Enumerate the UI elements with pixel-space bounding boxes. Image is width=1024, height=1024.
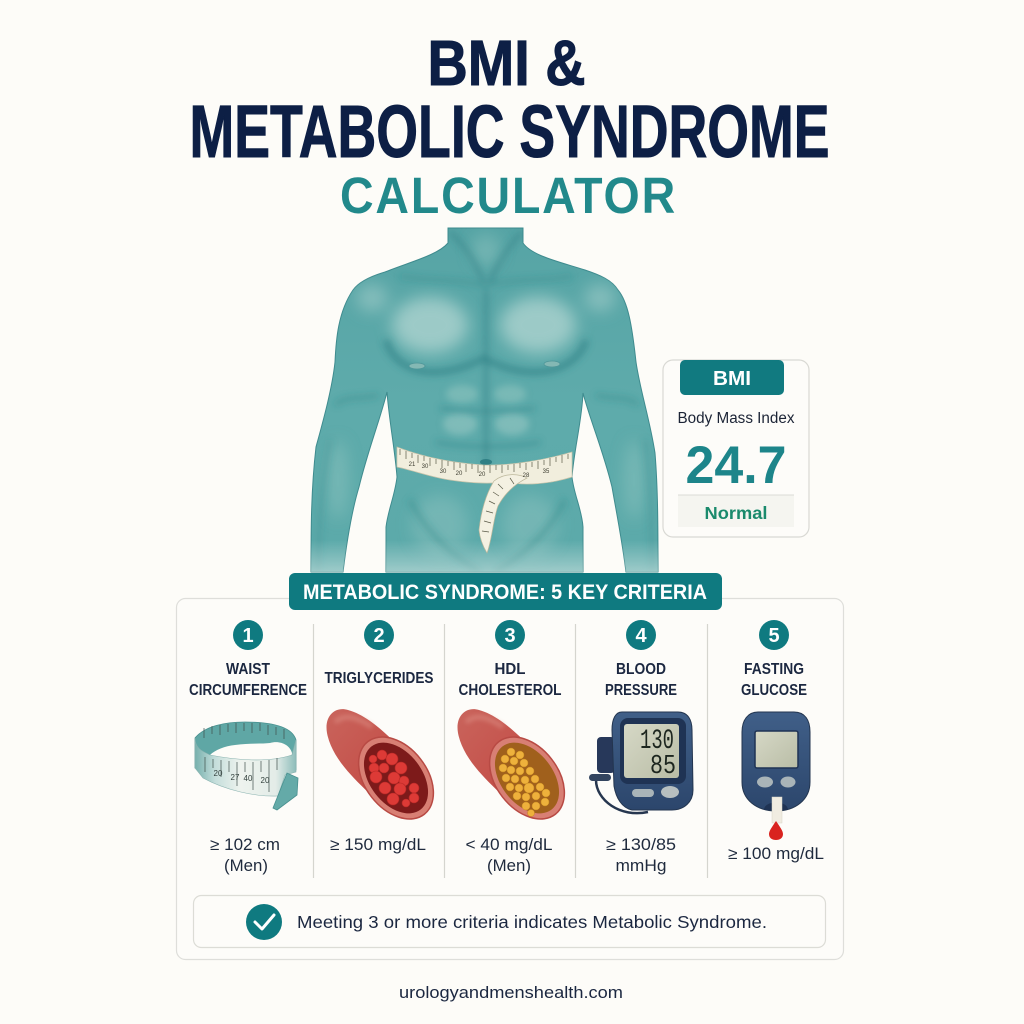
icon: tape ring: 27 — [231, 773, 240, 782]
criterion 4: blood pressure: 4 — [635, 625, 647, 647]
criterion 3: HDL cholesterol: (Men) — [487, 857, 531, 875]
criterion 3: HDL cholesterol: < 40 mg/dL — [466, 836, 552, 854]
criterion 3: HDL cholesterol: CHOLESTEROL — [458, 682, 562, 699]
BMI subtitle: Body Mass Index — [678, 410, 795, 427]
icon: tape ring: 40 — [244, 774, 253, 783]
criterion 5: fasting glucose: ≥ 100 mg/dL — [728, 845, 824, 863]
icon: tape ring: 20 — [214, 769, 223, 778]
measuring tape on waist: 20 — [456, 471, 463, 477]
BMI status — [678, 495, 794, 527]
icon: tape ring — [195, 722, 298, 810]
measuring tape on waist: 28 — [523, 473, 530, 479]
BMI status: Normal — [704, 503, 768, 523]
criterion 1: waist circumference: (Men) — [224, 857, 268, 875]
BMI card — [663, 360, 809, 537]
panel banner — [289, 573, 722, 610]
navel — [480, 459, 492, 465]
icon: blood pressure monitor: 85 — [650, 752, 676, 782]
BMI value: 24.7 — [686, 436, 786, 495]
criterion 5: fasting glucose — [728, 620, 824, 863]
icon: artery with red cells — [327, 709, 449, 833]
measuring tape on waist: 35 — [543, 469, 550, 475]
criterion 5: fasting glucose: 5 — [768, 625, 780, 647]
criterion 1: waist circumference — [189, 620, 307, 875]
criterion 1: waist circumference: CIRCUMFERENCE — [189, 682, 307, 699]
BMI tab: BMI — [713, 368, 751, 390]
criterion 4: blood pressure — [589, 620, 693, 875]
muscle highlights — [328, 234, 644, 555]
measuring tape on waist: 30 — [422, 464, 429, 470]
title: BMI & — [428, 27, 586, 99]
criterion 2: triglycerides: ≥ 150 mg/dL — [330, 836, 426, 854]
icon: check mark — [246, 904, 282, 940]
criterion 2: triglycerides: TRIGLYCERIDES — [324, 670, 434, 687]
criterion 1: waist circumference: WAIST — [226, 661, 270, 678]
title — [190, 27, 830, 224]
criterion 4: blood pressure: mmHg — [616, 857, 666, 875]
icon: blood pressure monitor — [589, 712, 693, 813]
criterion 4: blood pressure: ≥ 130/85 — [606, 836, 676, 854]
footer website: urologyandmenshealth.com — [399, 984, 623, 1002]
criterion 4: blood pressure: PRESSURE — [605, 682, 677, 699]
panel banner: METABOLIC SYNDROME: 5 KEY CRITERIA — [303, 581, 707, 604]
icon: tape ring: 20 — [261, 776, 270, 785]
criterion 3: HDL cholesterol — [458, 620, 580, 875]
criterion 2: triglycerides — [324, 620, 449, 854]
title: CALCULATOR — [340, 167, 677, 224]
icon: artery with cholesterol — [458, 709, 580, 833]
torso illustration — [300, 228, 670, 575]
criterion 2: triglycerides: 2 — [373, 625, 385, 647]
criterion 5: fasting glucose: GLUCOSE — [741, 682, 807, 699]
criterion 5: fasting glucose: FASTING — [744, 661, 804, 678]
measuring tape on waist — [397, 447, 572, 553]
icon: blood pressure monitor: 130 — [640, 726, 674, 757]
callout: diagnostic rule: Meeting 3 or more criteria indicates Metabolic Syndrome. — [297, 912, 767, 932]
criteria panel — [176, 598, 844, 960]
measuring tape on waist: 20 — [479, 472, 486, 478]
icon: glucose meter — [742, 712, 810, 840]
muscle shadows — [318, 232, 652, 572]
criterion 4: blood pressure: BLOOD — [616, 661, 666, 678]
criterion 1: waist circumference: 1 — [242, 625, 254, 647]
BMI tab — [680, 360, 784, 395]
measuring tape on waist: 21 — [409, 462, 416, 468]
criterion 3: HDL cholesterol: 3 — [504, 625, 516, 647]
nipples — [409, 363, 425, 369]
criterion 3: HDL cholesterol: HDL — [494, 661, 526, 678]
fade at the foot of the arms — [311, 544, 658, 572]
criterion 1: waist circumference: ≥ 102 cm — [210, 836, 280, 854]
callout: diagnostic rule — [194, 896, 826, 948]
measuring tape on waist: 30 — [440, 469, 447, 475]
